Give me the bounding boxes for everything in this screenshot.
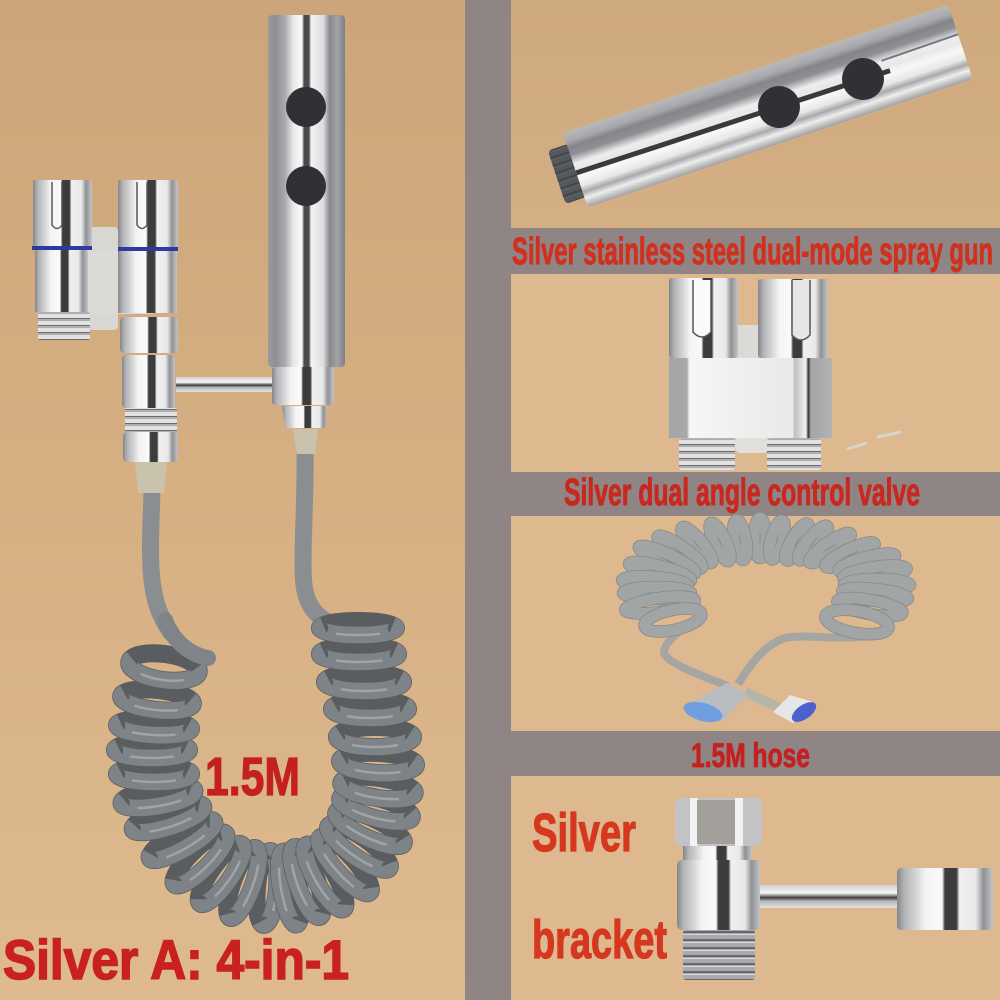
connector fittings [120, 317, 178, 493]
buttons [286, 87, 326, 127]
valve body [669, 278, 901, 470]
coiled hose [622, 518, 910, 638]
caption line 2: bracket [532, 910, 667, 970]
hose overlap at left coil top [165, 620, 208, 658]
dual angle valve assembled [32, 180, 178, 340]
hose connectors [681, 683, 819, 726]
panel: angle valve [564, 278, 920, 514]
panel: hose [622, 518, 910, 775]
hose: right lead into coil [303, 450, 350, 628]
hose: left lead into coil [151, 490, 172, 634]
caption: 1.5M hose [691, 737, 810, 775]
support arm [176, 377, 274, 392]
spray gun body [544, 5, 973, 213]
bracket fitting [675, 798, 993, 980]
panel: bracket [532, 798, 993, 980]
blue seal lines [32, 246, 178, 251]
hose leads [664, 622, 867, 708]
product title: Silver A: 4-in-1 [3, 928, 349, 991]
buttons [758, 58, 884, 128]
coiled hose [115, 621, 416, 926]
panel: spray gun [512, 5, 993, 273]
length label: 1.5M [205, 747, 300, 807]
spray gun assembled [268, 15, 345, 454]
left panel: assembled 4-in-1 set [3, 15, 416, 991]
caption line 1: Silver [532, 803, 636, 863]
